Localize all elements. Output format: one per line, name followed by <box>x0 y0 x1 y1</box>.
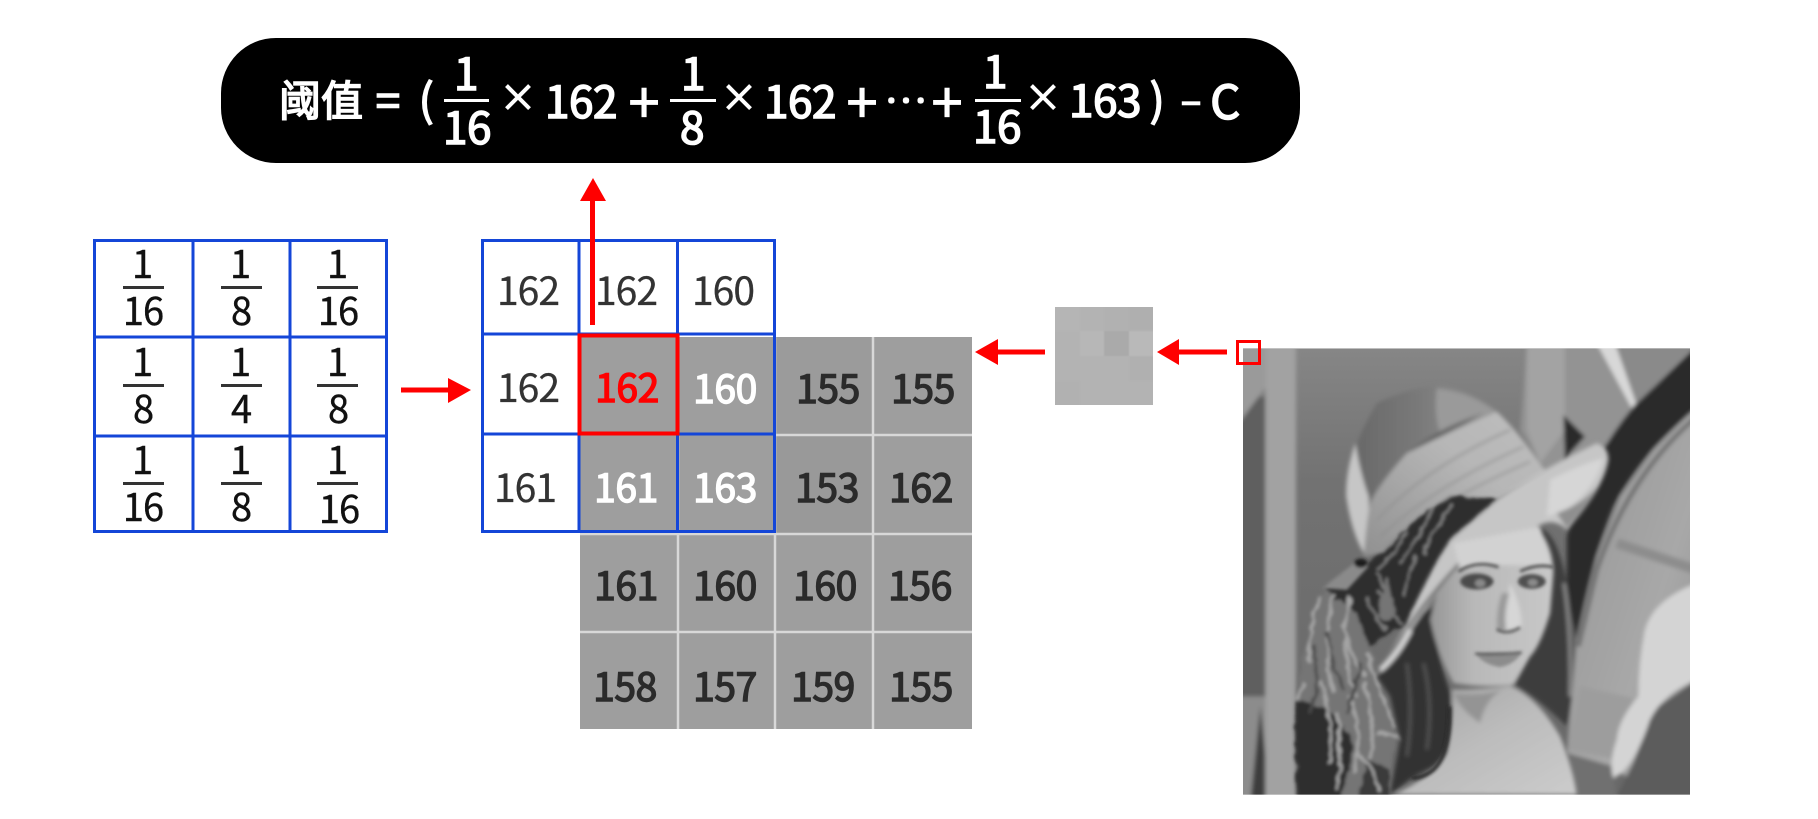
pixel values, outer cells: 155 <box>796 359 860 415</box>
weight 1/16 <box>123 234 164 336</box>
pixel values, outer cells: 159 <box>791 657 855 713</box>
fraction 1/16 last <box>973 37 1021 156</box>
pixel values, outer cells: 155 <box>889 657 953 713</box>
formula banner <box>221 37 1300 163</box>
closing parenthesis: ) <box>1150 65 1164 129</box>
neck and shoulder <box>1394 686 1577 795</box>
shoulder hair line <box>1412 706 1450 778</box>
weight 1/16: 1 <box>132 430 152 485</box>
opening parenthesis: ( <box>419 65 433 129</box>
neighbourhood values: 160 <box>692 261 754 317</box>
panel: gaussian weight grid <box>94 234 387 534</box>
weight 1/16 <box>317 234 358 336</box>
weight 1/16: 1 <box>132 234 152 289</box>
value 163: 163 <box>1069 66 1141 130</box>
icon: enlarged pixel mosaic <box>1053 305 1155 407</box>
weight 1/8 <box>317 332 358 434</box>
ellipsis: ⋯ <box>884 66 928 130</box>
fraction 1/16 <box>443 39 491 157</box>
plus third: + <box>931 59 963 140</box>
neighbourhood values: 163 <box>693 458 757 514</box>
highlighted centre pixel <box>580 336 678 434</box>
minus: – <box>1181 70 1201 125</box>
middle dark hair <box>1377 606 1452 795</box>
highlighted centre pixel: 162 <box>595 358 659 414</box>
crown highlight left <box>1346 443 1369 553</box>
weight 1/4 <box>221 332 262 434</box>
pixel values, outer cells: 162 <box>889 458 953 514</box>
weight 1/16 <box>317 430 359 534</box>
arrow: weights to pixels <box>401 378 471 403</box>
weight 1/16: 16 <box>123 477 163 532</box>
weight 1/16: 16 <box>123 281 163 336</box>
pixel values, outer cells: 160 <box>793 556 857 612</box>
weight 1/16: 1 <box>327 234 347 289</box>
neighbourhood values: 162 <box>497 261 559 317</box>
weight 1/8 <box>123 332 164 434</box>
pixel values, outer cells: 157 <box>693 657 757 713</box>
neighbourhood values: 160 <box>693 359 757 415</box>
formula label: threshold: 阈值 <box>279 68 363 129</box>
fraction 1/16 last: 1 <box>983 37 1007 101</box>
neighbourhood values: 162 <box>497 358 559 414</box>
weight 1/4: 1 <box>230 332 250 387</box>
fraction 1/16 last: 16 <box>973 92 1021 156</box>
weight 1/8: 1 <box>132 332 152 387</box>
weight 1/16 <box>123 430 164 532</box>
arrow: mosaic to pixel grid <box>975 339 1045 365</box>
weight 1/16: 16 <box>319 479 359 534</box>
weight 1/8 <box>221 234 262 336</box>
times: × <box>500 68 536 122</box>
weight 1/8: 1 <box>230 430 250 485</box>
pixel values, outer cells: 155 <box>891 359 955 415</box>
panel: gray pixel value grid <box>580 337 972 729</box>
plus second: + <box>846 59 878 140</box>
weight 1/8: 1 <box>230 234 250 289</box>
times last: × <box>1024 68 1062 122</box>
neighbourhood values: 161 <box>494 458 556 514</box>
hat ribbon knot <box>1322 560 1369 590</box>
pixel values, outer cells: 156 <box>888 556 952 612</box>
arrow: image patch to mosaic <box>1157 339 1227 365</box>
arrow: up to formula, shaft over grid <box>590 230 595 325</box>
hat band <box>1364 412 1547 557</box>
hat crown <box>1358 394 1495 474</box>
value 162: 162 <box>545 67 617 131</box>
neighbourhood values <box>494 261 757 514</box>
weight 1/8: 8 <box>133 379 153 434</box>
equals sign: = <box>376 66 400 130</box>
weight 1/8: 8 <box>328 379 348 434</box>
fraction 1/8: 8 <box>680 93 704 157</box>
fraction 1/16: 1 <box>454 39 478 103</box>
weight 1/8: 8 <box>231 281 251 336</box>
pixel values, outer cells: 158 <box>593 657 657 713</box>
times second: × <box>720 68 758 122</box>
weight 1/4: 4 <box>231 379 251 434</box>
fraction 1/8: 1 <box>681 39 705 103</box>
weight 1/8: 1 <box>327 332 347 387</box>
selection box on photo <box>1238 342 1260 364</box>
weight 1/16: 1 <box>327 430 347 485</box>
photo: grayscale portrait of woman in hat <box>1234 343 1697 810</box>
constant C: C <box>1210 64 1240 133</box>
weight 1/16: 16 <box>318 281 358 336</box>
value 162 second: 162 <box>764 67 836 131</box>
brows, eyes, nose, lips <box>1459 564 1498 572</box>
pixel values, outer cells: 160 <box>693 556 757 612</box>
pixel values, outer cells: 153 <box>795 458 859 514</box>
arrow: up to formula <box>580 178 606 325</box>
plus: + <box>628 59 660 140</box>
fraction 1/8 <box>670 39 716 157</box>
brim upper and lower <box>1377 443 1608 676</box>
neighbourhood values: 161 <box>594 458 658 514</box>
fraction 1/16: 16 <box>443 93 491 157</box>
face <box>1430 527 1553 686</box>
weight 1/8: 8 <box>231 477 251 532</box>
feathers <box>1295 497 1497 803</box>
pixel values, outer cells <box>593 359 955 713</box>
pixel values, outer cells: 161 <box>594 556 658 612</box>
weight 1/8 <box>221 430 262 532</box>
panel: blue 3x3 neighbourhood window <box>482 240 775 532</box>
neighbourhood values: 162 <box>595 261 657 317</box>
